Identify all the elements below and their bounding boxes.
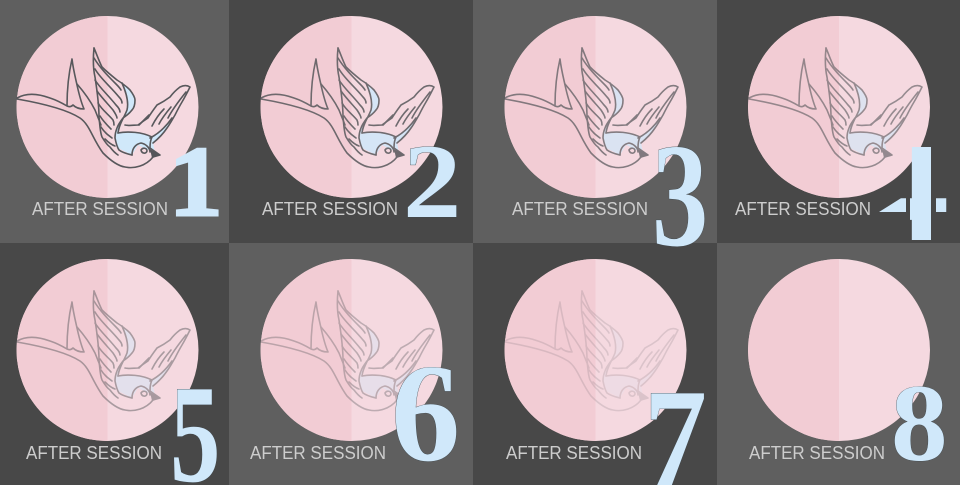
panel: session 7: [473, 243, 717, 485]
label: after session 8: AFTER SESSION: [749, 443, 885, 463]
icon: swallow session 6: [261, 291, 434, 411]
label: after session 4: AFTER SESSION: [735, 199, 871, 219]
number 4: 4: [862, 54, 950, 295]
icon: swallow session 7: [505, 291, 678, 411]
circle: session 7: [504, 259, 686, 441]
circle: session 8: [748, 259, 930, 441]
circle: session 3: [504, 16, 686, 198]
icon: swallow session 4: [749, 48, 922, 168]
circle: session 5: [16, 259, 198, 441]
label: after session 6: AFTER SESSION: [250, 443, 386, 463]
circle: session 2: [260, 16, 442, 198]
number 3: 3: [652, 114, 708, 278]
panel: session 4: [717, 0, 960, 243]
icon: swallow session 3: [505, 48, 678, 168]
panel: session 3: [473, 0, 717, 243]
number 1: 1: [169, 127, 223, 237]
label: after session 7: AFTER SESSION: [506, 443, 642, 463]
number 8: 8: [891, 362, 948, 485]
panel: session 8: [717, 243, 960, 485]
icon: swallow session 2: [261, 48, 434, 168]
label: after session 1: AFTER SESSION: [32, 199, 168, 219]
circle: session 6: [260, 259, 442, 441]
panel: session 1: [0, 0, 229, 243]
panel: session 2: [229, 0, 473, 243]
icon: swallow session 1: [17, 48, 190, 168]
circle: session 1: [16, 16, 198, 198]
panel: session 6: [229, 243, 473, 485]
panel: session 5: [0, 243, 229, 485]
label: after session 3: AFTER SESSION: [512, 199, 648, 219]
label: after session 2: AFTER SESSION: [262, 199, 398, 219]
label: after session 5: AFTER SESSION: [26, 443, 162, 463]
icon: swallow session 5: [17, 291, 190, 411]
number 2: 2: [403, 124, 461, 241]
circle: session 4: [748, 16, 930, 198]
